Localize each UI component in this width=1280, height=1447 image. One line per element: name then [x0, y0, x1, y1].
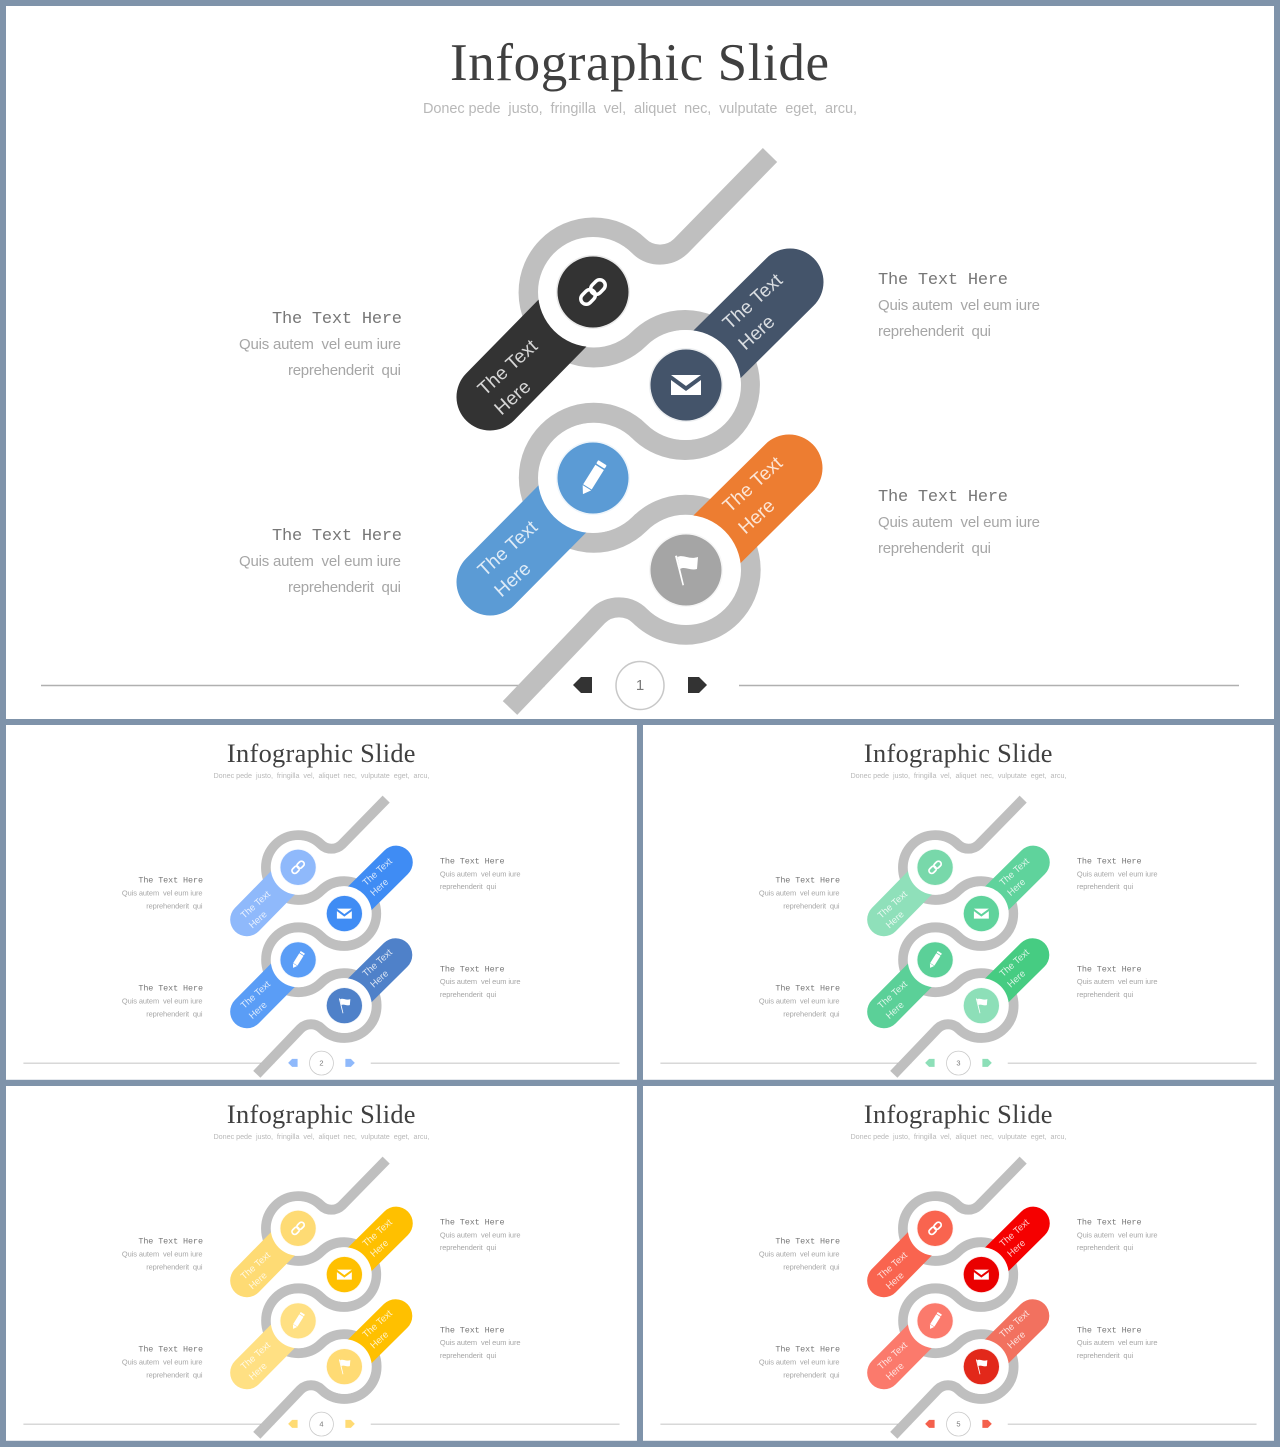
slide 4 icon: mail	[327, 1257, 362, 1292]
slide 1 icon: flag	[650, 534, 722, 606]
slide 3 icon: flag	[964, 988, 999, 1023]
slide 2 text block: lower left: reprehenderit qui	[146, 1010, 203, 1019]
slide 4 pill text: top right: Here	[368, 1238, 391, 1260]
slide 2 pill text: top right: Here	[368, 877, 391, 899]
slide 1 text block: upper right: The Text Here	[878, 271, 1008, 290]
slide 3 pill text: top right: The Text	[998, 856, 1032, 888]
slide 1 text block: upper right: Quis autem vel eum iure	[878, 297, 1040, 314]
slide 2 previous arrow	[288, 1059, 298, 1067]
slide 2 text block: lower right: The Text Here	[440, 964, 505, 974]
slide 5 pill text: top right: The Text	[998, 1217, 1032, 1249]
slide 5 text block: upper right: The Text Here	[1077, 1217, 1142, 1227]
slide 1 pill text: top right: Here	[735, 311, 779, 355]
slide 4 pill text: bottom left: Here	[247, 1361, 270, 1383]
slide 4 subtitle: Donec pede justo, fringilla vel, aliquet nec, vulputate eget, arcu,	[213, 1132, 429, 1141]
slide 1 icon: link	[558, 256, 628, 328]
slide 2 pill: top left	[247, 867, 298, 920]
slide 2 icon: pencil	[280, 942, 316, 978]
slide 2 pill text: top left: Here	[247, 909, 270, 931]
slide 2 title: Infographic Slide	[227, 739, 416, 768]
slide 2 winding path	[257, 799, 386, 1074]
slide 1 pill text: bottom right: Here	[735, 495, 779, 539]
slide 3 page number	[947, 1051, 970, 1075]
slide 1 pill: bottom right	[686, 468, 789, 570]
slide 3 pill: top left	[884, 867, 935, 920]
slide 3 subtitle: Donec pede justo, fringilla vel, aliquet nec, vulputate eget, arcu,	[850, 771, 1066, 780]
slide 1 text block: upper right: reprehenderit qui	[878, 323, 991, 340]
slide 1 previous arrow	[573, 677, 592, 693]
slide 3 panel	[643, 725, 1274, 1080]
slide 4 text block: upper left	[122, 1237, 203, 1272]
slide 4 text block: lower left	[122, 1345, 203, 1380]
slide 3 text block: upper right: Quis autem vel eum iure	[1077, 869, 1158, 878]
slide 4 text block: upper right: The Text Here	[440, 1217, 505, 1227]
slide 2 icon: link	[280, 850, 316, 885]
slide 4 text block: lower left: reprehenderit qui	[146, 1371, 203, 1380]
slide 3 text block: lower right	[1077, 964, 1158, 999]
slide 4 pill text: bottom right: The Text	[361, 1308, 395, 1340]
slide 5 text block: upper right: reprehenderit qui	[1077, 1243, 1133, 1252]
slide 4 title: Infographic Slide	[227, 1100, 416, 1129]
slide 3 text block: upper left: Quis autem vel eum iure	[759, 889, 840, 898]
slide 1 text block: upper left: The Text Here	[272, 310, 402, 329]
slide 3 icon: mail	[964, 896, 999, 931]
slide 5 previous arrow	[925, 1420, 935, 1428]
slide 3 pill text: bottom right: The Text	[998, 947, 1032, 979]
slide 3 text block: upper left	[759, 876, 840, 911]
slide 5 winding path	[894, 1160, 1023, 1435]
slide 2 text block: lower left: The Text Here	[138, 984, 203, 994]
slide 2 text block: upper right: The Text Here	[440, 856, 505, 866]
slide 3 text block: upper right: reprehenderit qui	[1077, 882, 1133, 891]
slide 4 previous arrow	[288, 1420, 298, 1428]
slide 2 panel	[6, 725, 637, 1080]
slide 4 page number	[310, 1412, 333, 1436]
slide 1 pill text: bottom right: The Text	[719, 452, 788, 517]
slide 3 title: Infographic Slide	[864, 739, 1053, 768]
slide 2 text block: lower left: Quis autem vel eum iure	[122, 997, 203, 1006]
slide 1 pill: bottom left	[490, 478, 593, 582]
slide 3 pill text: bottom left: Here	[884, 1000, 907, 1022]
slide 4 text block: upper left: reprehenderit qui	[146, 1263, 203, 1272]
slide 1 text block: lower left: Quis autem vel eum iure	[239, 553, 401, 570]
slide 5 text block: upper right	[1077, 1217, 1158, 1252]
slide 3 text block: upper right	[1077, 856, 1158, 891]
slide 5 text block: lower left: Quis autem vel eum iure	[759, 1358, 840, 1367]
slide 3 text block: lower left: The Text Here	[775, 984, 840, 994]
slide 1 icon: mail	[650, 350, 722, 420]
slide 5 pill: bottom right	[981, 1316, 1033, 1367]
slide 1 pill text: top left: Here	[491, 376, 535, 420]
slide 3 text block: upper left: reprehenderit qui	[783, 902, 840, 911]
slide 5 text block: upper left: reprehenderit qui	[783, 1263, 840, 1272]
slide 3 pill text: top left: The Text	[876, 889, 910, 921]
slide 4 text block: lower left: Quis autem vel eum iure	[122, 1358, 203, 1367]
slide 5 text block: upper right: Quis autem vel eum iure	[1077, 1230, 1158, 1239]
slide 3 pill text: top right: Here	[1005, 877, 1028, 899]
slide 2 pill text: top right: The Text	[361, 856, 395, 888]
slide 2: blue version	[6, 725, 637, 1080]
slide 1 pill: top left	[490, 292, 593, 397]
slide 4 icon: link	[280, 1211, 316, 1246]
slide 5 page number	[947, 1412, 970, 1436]
slide 4 winding path	[257, 1160, 386, 1435]
slide 2 text block: upper right	[440, 856, 521, 891]
slide 5 text block: lower right	[1077, 1325, 1158, 1360]
slide 5 pill text: top left: Here	[884, 1270, 907, 1292]
slide 5 pill: top left	[884, 1228, 935, 1281]
slide 5 pill text: top left: The Text	[876, 1250, 910, 1282]
slide 2 text block: upper right: reprehenderit qui	[440, 882, 496, 891]
slide 4 text block: upper right: reprehenderit qui	[440, 1243, 496, 1252]
slide 1 text block: lower left: The Text Here	[272, 527, 402, 546]
slide 4 pill text: top left: Here	[247, 1270, 270, 1292]
slide 2 icon: flag	[327, 988, 362, 1023]
slide 3 previous arrow	[925, 1059, 935, 1067]
slide 5 next arrow	[982, 1420, 992, 1428]
slide 5 text block: lower left	[759, 1345, 840, 1380]
slide 5 pill: top right	[981, 1223, 1033, 1275]
slide 1 winding path	[510, 155, 770, 708]
slide 2 pill: bottom left	[247, 960, 298, 1012]
slide 2 text block: lower right: Quis autem vel eum iure	[440, 977, 521, 986]
slide 5 pill text: bottom left: The Text	[876, 1340, 910, 1372]
slide 3 text block: lower left: reprehenderit qui	[783, 1010, 840, 1019]
slide 4 next arrow	[345, 1420, 355, 1428]
slide 2 text block: lower right	[440, 964, 521, 999]
slide 5 title: Infographic Slide	[864, 1100, 1053, 1129]
slide 1 icon: pencil	[558, 442, 628, 514]
slide 5: red version	[643, 1086, 1274, 1441]
slide 4 text block: lower right: The Text Here	[440, 1325, 505, 1335]
slide 5 icon: flag	[964, 1349, 999, 1384]
slide 3 text block: lower left	[759, 984, 840, 1019]
slide 1 text block: lower right	[878, 488, 1040, 557]
slide 4 icon: pencil	[280, 1303, 316, 1339]
slide 1: main dark and multicolour version	[6, 6, 1274, 719]
slide 5 icon: mail	[964, 1257, 999, 1292]
slide 5 pill text: bottom right: The Text	[998, 1308, 1032, 1340]
slide 4 icon: flag	[327, 1349, 362, 1384]
slide 1 pill text: bottom left: Here	[491, 558, 535, 602]
slide 2 pill text: top left: The Text	[239, 889, 273, 921]
slide 5 text block: lower right: Quis autem vel eum iure	[1077, 1338, 1158, 1347]
slide 2 text block: lower left	[122, 984, 203, 1019]
slide 3 pill text: bottom left: The Text	[876, 979, 910, 1011]
slide 3 pill: bottom left	[884, 960, 935, 1012]
slide 3 text block: lower right: reprehenderit qui	[1077, 990, 1133, 999]
slide 4 pill text: top right: The Text	[361, 1217, 395, 1249]
slide 1 text block: lower left: reprehenderit qui	[288, 579, 401, 596]
slide 3 page number: 3	[956, 1059, 961, 1068]
slide 4 text block: lower right: Quis autem vel eum iure	[440, 1338, 521, 1347]
slide 2 pill text: bottom left: Here	[247, 1000, 270, 1022]
slide 5 icon: link	[917, 1211, 953, 1246]
slide 3 text block: lower right: Quis autem vel eum iure	[1077, 977, 1158, 986]
slide 4 text block: upper left: Quis autem vel eum iure	[122, 1250, 203, 1259]
slide 5 icon: pencil	[917, 1303, 953, 1339]
slide 2 text block: upper right: Quis autem vel eum iure	[440, 869, 521, 878]
slide 1 next arrow	[688, 677, 707, 693]
slide 1 text block: lower left	[239, 527, 402, 596]
slide 5 text block: upper left	[759, 1237, 840, 1272]
slide 3 text block: lower left: Quis autem vel eum iure	[759, 997, 840, 1006]
slide 4 text block: upper right	[440, 1217, 521, 1252]
slide 3 next arrow	[982, 1059, 992, 1067]
slide 3 text block: upper left: The Text Here	[775, 876, 840, 886]
slide 1 pill text: top left: The Text	[474, 335, 543, 400]
slide 3 icon: link	[917, 850, 953, 885]
slide 2 pill text: bottom left: The Text	[239, 979, 273, 1011]
slide 2 icon: mail	[327, 896, 362, 931]
slide 1 pill: top right	[686, 282, 790, 385]
slide 4 pill: bottom right	[344, 1316, 396, 1367]
slide 2 page number: 2	[319, 1059, 324, 1068]
slide 3 text block: lower right: The Text Here	[1077, 964, 1142, 974]
slide 4 text block: upper left: The Text Here	[138, 1237, 203, 1247]
slide 5 panel	[643, 1086, 1274, 1441]
slide 2 text block: upper left: reprehenderit qui	[146, 902, 203, 911]
slide 5 text block: lower left: reprehenderit qui	[783, 1371, 840, 1380]
slide 2 pill: top right	[344, 862, 396, 914]
slide 3 winding path	[894, 799, 1023, 1074]
slide 4 pill text: bottom right: Here	[368, 1329, 391, 1351]
slide 2 text block: upper left: The Text Here	[138, 876, 203, 886]
slide 4 pill text: bottom left: The Text	[239, 1340, 273, 1372]
slide 5 pill text: top right: Here	[1005, 1238, 1028, 1260]
slide 1 text block: lower right: Quis autem vel eum iure	[878, 514, 1040, 531]
slide 2 page number	[310, 1051, 333, 1075]
slide 1 subtitle: Donec pede justo, fringilla vel, aliquet nec, vulputate eget, arcu,	[423, 101, 857, 117]
slide 2 pill text: bottom right: Here	[368, 968, 391, 990]
slide 3 text block: upper right: The Text Here	[1077, 856, 1142, 866]
slide 5 text block: lower right: The Text Here	[1077, 1325, 1142, 1335]
slide 2 subtitle: Donec pede justo, fringilla vel, aliquet nec, vulputate eget, arcu,	[213, 771, 429, 780]
slide 1 title: Infographic Slide	[450, 34, 829, 92]
slide 1 text block: upper left: Quis autem vel eum iure	[239, 336, 401, 353]
slide 1 text block: upper right	[878, 271, 1040, 340]
slide 5 pill text: bottom right: Here	[1005, 1329, 1028, 1351]
slide 1 text block: upper left	[239, 310, 402, 379]
slide 3 pill text: bottom right: Here	[1005, 968, 1028, 990]
slide 1 text block: lower right: The Text Here	[878, 488, 1008, 507]
slide 1 page number	[616, 662, 664, 710]
slide 4 pill: top right	[344, 1223, 396, 1275]
slide 4 pill: top left	[247, 1228, 298, 1281]
slide 3 pill: top right	[981, 862, 1033, 914]
slide 5 pill: bottom left	[884, 1321, 935, 1373]
slide 3 icon: pencil	[917, 942, 953, 978]
slide 2 text block: upper left	[122, 876, 203, 911]
slide 4 text block: lower right: reprehenderit qui	[440, 1351, 496, 1360]
slide 3 pill: bottom right	[981, 955, 1033, 1006]
slide 2 text block: upper left: Quis autem vel eum iure	[122, 889, 203, 898]
slide 4 pill text: top left: The Text	[239, 1250, 273, 1282]
slide 2 pill text: bottom right: The Text	[361, 947, 395, 979]
slide 5 text block: upper left: The Text Here	[775, 1237, 840, 1247]
slide 2 pill: bottom right	[344, 955, 396, 1006]
slide 1 pill text: bottom left: The Text	[474, 516, 543, 581]
slide 3: green version	[643, 725, 1274, 1080]
slide 4 page number: 4	[319, 1420, 324, 1429]
slide 5 text block: lower left: The Text Here	[775, 1345, 840, 1355]
slide 5 pill text: bottom left: Here	[884, 1361, 907, 1383]
slide 4 panel	[6, 1086, 637, 1441]
slide 4 pill: bottom left	[247, 1321, 298, 1373]
slide 1 panel	[6, 6, 1274, 719]
slide 4 text block: lower right	[440, 1325, 521, 1360]
slide 4: yellow version	[6, 1086, 637, 1441]
slide 1 text block: lower right: reprehenderit qui	[878, 540, 991, 557]
slide 2 next arrow	[345, 1059, 355, 1067]
slide 4 text block: upper right: Quis autem vel eum iure	[440, 1230, 521, 1239]
slide 1 page number: 1	[636, 677, 644, 694]
slide 5 page number: 5	[956, 1420, 961, 1429]
slide 5 text block: lower right: reprehenderit qui	[1077, 1351, 1133, 1360]
slide 3 pill text: top left: Here	[884, 909, 907, 931]
slide 5 text block: upper left: Quis autem vel eum iure	[759, 1250, 840, 1259]
slide 1 text block: upper left: reprehenderit qui	[288, 362, 401, 379]
slide 4 text block: lower left: The Text Here	[138, 1345, 203, 1355]
slide 5 subtitle: Donec pede justo, fringilla vel, aliquet nec, vulputate eget, arcu,	[850, 1132, 1066, 1141]
slide 1 pill text: top right: The Text	[719, 269, 788, 334]
slide 2 text block: lower right: reprehenderit qui	[440, 990, 496, 999]
